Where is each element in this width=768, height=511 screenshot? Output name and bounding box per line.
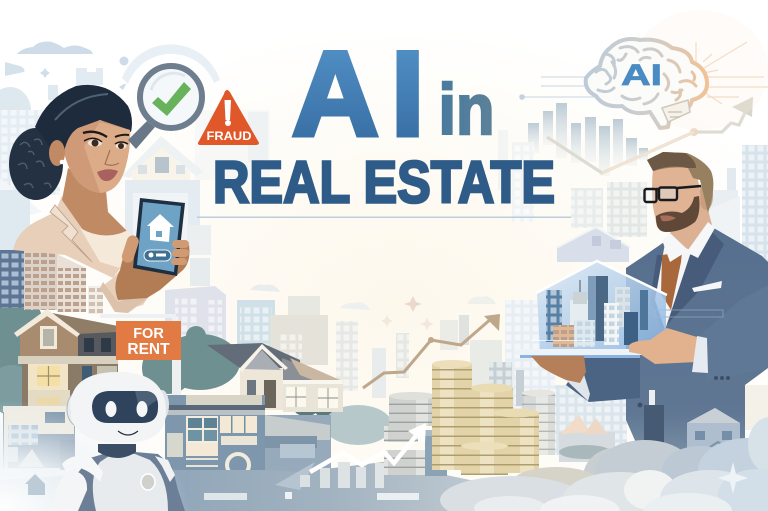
- pale house behind woman: [122, 136, 204, 250]
- icon: fraud warning triangle: FRAUD: [206, 129, 252, 143]
- suit torso: [626, 227, 768, 460]
- small pale houses: [559, 415, 615, 462]
- blouse: [80, 228, 135, 268]
- man: [566, 152, 768, 460]
- house: right bungalow: [207, 343, 343, 412]
- tall gold stack: [432, 360, 472, 470]
- lower hand: [531, 356, 586, 383]
- title words: REAL ESTATE: REAL ESTATE: [213, 150, 555, 216]
- icon: AI brain: AI: [621, 59, 662, 92]
- head hair: [35, 85, 132, 152]
- eyebrows, eyes, mouth: [83, 132, 129, 181]
- glasses: [644, 186, 701, 202]
- man's hands: [531, 328, 708, 383]
- bottom-left white fade: [0, 400, 190, 511]
- arrow: white rising trend: [310, 423, 426, 472]
- face: [64, 120, 130, 193]
- front gold stack: [493, 408, 539, 473]
- ear: [699, 182, 713, 210]
- backdrop: left pale skyline: [0, 42, 270, 250]
- tablet: [514, 349, 646, 355]
- left tower buildings: [0, 248, 103, 314]
- title word: AI: AI: [292, 27, 424, 161]
- commercial buildings: [3, 395, 331, 495]
- backdrop: right chart and skyline: [498, 10, 768, 265]
- pocket square: [692, 281, 722, 292]
- hologram buildings: [546, 276, 648, 347]
- title word: in: in: [438, 71, 494, 150]
- backdrop: middle skyline: [165, 225, 768, 462]
- left arm sleeve: [566, 356, 640, 402]
- upper hand: [629, 328, 697, 364]
- face: [652, 158, 700, 232]
- short gold stack: [461, 442, 508, 475]
- neck: [668, 198, 712, 250]
- for rent sign: [100, 314, 181, 398]
- trees: [0, 296, 392, 445]
- robot: [52, 372, 185, 511]
- gray low stack: [384, 426, 447, 476]
- hair: [647, 152, 713, 213]
- shirt cuff left: [566, 368, 590, 401]
- house: brown two-storey: [14, 309, 118, 406]
- icon: fraud warning triangle: [198, 90, 259, 145]
- magnifier handle: [128, 120, 155, 149]
- collar: [662, 222, 715, 262]
- title: [213, 27, 555, 216]
- hologram line: [655, 310, 723, 317]
- phone: [133, 198, 185, 276]
- arrow: brown rising trend: [363, 314, 500, 388]
- neck and chest: [62, 168, 128, 240]
- small house near man: [687, 408, 740, 470]
- tie: [661, 252, 682, 310]
- right arm: [695, 285, 768, 382]
- beard: [656, 196, 700, 232]
- cream building right of man: [740, 385, 768, 430]
- for rent sign: FOR: [133, 326, 164, 342]
- fingers: [120, 234, 189, 265]
- hologram house: [514, 261, 667, 358]
- lapels and shirt: [650, 232, 724, 330]
- for rent sign: RENT: [127, 341, 170, 358]
- ear: [49, 140, 65, 166]
- robot neck: [98, 444, 136, 458]
- medium gold stack: [471, 384, 513, 446]
- title underline: [197, 216, 571, 218]
- shirt at waist: [649, 390, 655, 405]
- gray coin stack right: [522, 390, 555, 455]
- robot head: [67, 372, 169, 443]
- magnifying glass with check: [137, 63, 205, 131]
- small faded house bottom left: [25, 474, 45, 495]
- robot body: [52, 452, 185, 511]
- gray coin stack left: [389, 392, 435, 426]
- woman: [9, 85, 189, 313]
- ground band: [0, 462, 560, 511]
- sleeve buttons: [714, 376, 730, 380]
- hand behind phone: [115, 235, 189, 300]
- hair bun: [9, 128, 63, 200]
- pale house above hologram: [556, 227, 630, 262]
- icon: AI brain: [586, 39, 707, 128]
- clouds foreground: [440, 417, 768, 511]
- coin stacks: [384, 360, 555, 476]
- jacket: [13, 196, 148, 313]
